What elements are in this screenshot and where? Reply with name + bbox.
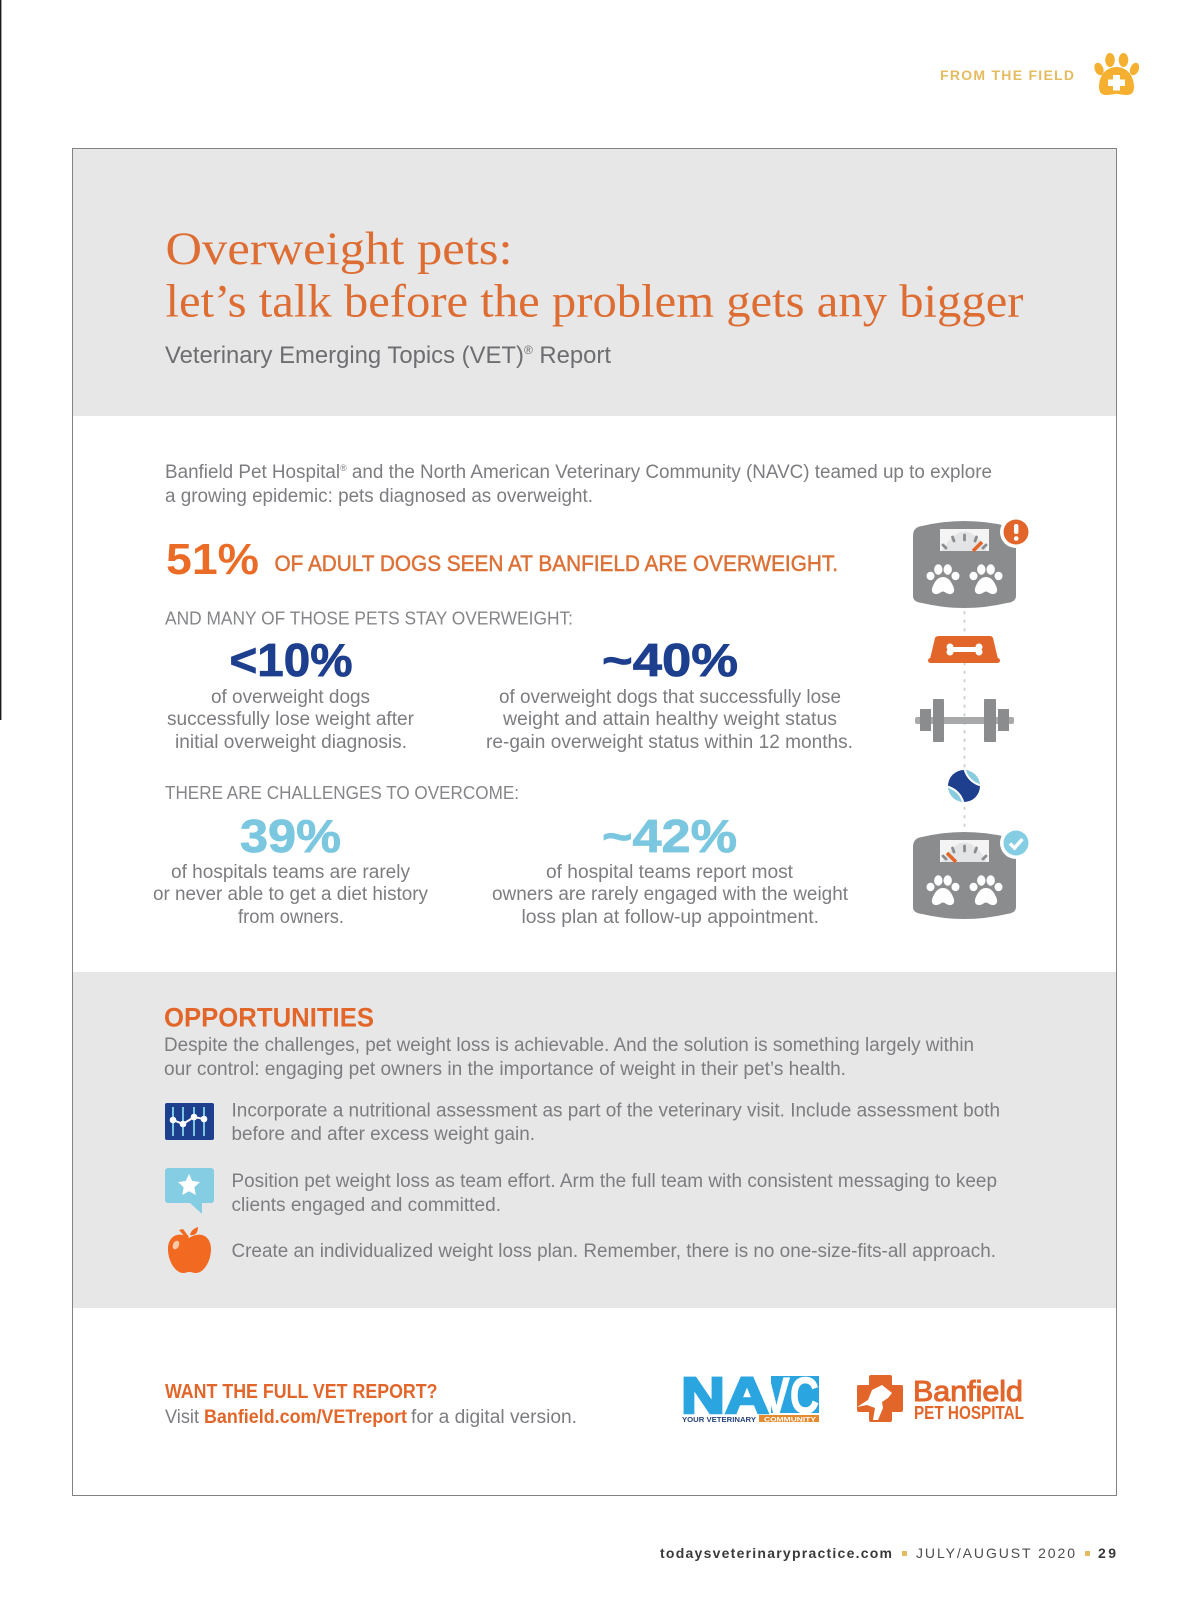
bullet text: team effort: clients engaged and committed. [232,1195,501,1216]
stat: 39 percent: or never able to get a diet history [153,884,428,905]
panel: opportunities [73,972,1116,1308]
bullet text: nutritional assessment [232,1100,1000,1145]
key stat: 51 percent [166,535,838,584]
stat: about 42 percent: of hospital teams report most [546,862,794,883]
stat: less than 10 percent [167,634,415,753]
logo: NAVC: YOUR VETERINARY [682,1417,756,1424]
logo: Banfield [857,1375,1024,1423]
stat: less than 10 percent: initial overweight diagnosis. [175,732,407,753]
stat: less than 10 percent: of overweight dogs [211,687,370,708]
icon: scale with alert [913,516,1032,608]
call to action: Banfield.com/VETreport [204,1407,408,1428]
stat: less than 10 percent: successfully lose weight after [167,709,415,730]
subtitle: Report [533,342,611,369]
stat: about 42 percent: ~42% [602,810,737,862]
icon: sliders [165,1103,214,1140]
icon: food bowl [928,636,1000,663]
heading: challenges: THERE ARE CHALLENGES TO OVERCOME: [165,782,519,803]
intro paragraph [165,462,992,507]
heading: opportunities: OPPORTUNITIES [164,1002,374,1032]
stat: about 42 percent: owners are rarely engaged with the weight [492,884,849,905]
stat: 39 percent: of hospitals teams are rarely [171,862,410,883]
icon: paw with cross [1093,53,1141,95]
section label: from the field: FROM THE FIELD [940,67,1074,83]
call to action [165,1381,577,1428]
stat: about 40 percent: ~40% [602,634,738,686]
logo: NAVC [681,1367,819,1424]
bullet text: nutritional assessment: Incorporate a nutritional assessment as part of the veterinary visit. Include assessment both [232,1100,1000,1122]
footer: todaysveterinarypractice.com [660,1545,892,1561]
bullet text: team effort: Position pet weight loss as team effort. Arm the full team with consistent messaging to keep [232,1171,997,1192]
icon: dumbbell [915,699,1014,742]
heading: stay overweight: AND MANY OF THOSE PETS STAY OVERWEIGHT: [165,608,573,628]
stat: about 42 percent [492,810,849,928]
icon: ball [948,770,980,802]
stat: 39 percent [153,810,428,928]
intro paragraph: a growing epidemic: pets diagnosed as overweight. [165,486,593,507]
stat: about 42 percent: loss plan at follow-up appointment. [522,907,819,928]
subtitle: ® [524,343,533,357]
logo: NAVC: VC [763,1367,819,1424]
opportunities intro text [164,1035,974,1080]
key stat: 51 percent: 51% [166,535,259,584]
stat: about 40 percent: of overweight dogs that successfully lose [499,687,841,708]
icon: scale with check [913,827,1032,919]
call to action: WANT THE FULL VET REPORT? [165,1381,438,1403]
intro paragraph: Banfield Pet Hospital [165,462,341,483]
panel: title band [73,149,1116,416]
logo: Banfield: Banfield [913,1376,1023,1408]
icon: apple [168,1227,211,1273]
logo: NAVC: NA [681,1367,769,1424]
opportunities intro text: our control: engaging pet owners in the importance of weight in their pet’s health. [164,1059,846,1080]
call to action: Visit [165,1407,200,1428]
footer: 29 [1098,1545,1116,1561]
title line 1: Overweight pets: [166,223,512,275]
call to action: for a digital version. [411,1407,577,1428]
logo: NAVC: COMMUNITY [764,1416,817,1424]
stat: less than 10 percent: <10% [230,634,352,686]
icon: star speech bubble [165,1168,214,1214]
subtitle: Veterinary Emerging Topics (VET) [165,342,526,369]
panel: report frame [72,148,1116,1496]
bullet text: individualized plan: Create an individualized weight loss plan. Remember, there is no one-size-fits-all approach. [232,1241,996,1262]
intro paragraph: and the North American Veterinary Community (NAVC) teamed up to explore [347,462,992,483]
stat: about 40 percent [486,634,853,753]
bullet text: team effort [232,1171,997,1216]
stat: about 40 percent: re-gain overweight status within 12 months. [486,732,853,753]
intro paragraph: ® [340,463,347,473]
title line 2: let’s talk before the problem gets any bigger [166,276,1024,328]
stat: 39 percent: 39% [240,810,341,862]
logo: Banfield: PET HOSPITAL [914,1403,1024,1423]
footer: JULY/AUGUST 2020 [916,1545,1075,1561]
stat: about 40 percent: weight and attain healthy weight status [502,709,837,730]
dotted connector [964,612,966,828]
bullet text: nutritional assessment: before and after excess weight gain. [232,1124,535,1145]
stat: 39 percent: from owners. [238,907,344,928]
key stat: 51 percent: OF ADULT DOGS SEEN AT BANFIELD ARE OVERWEIGHT. [274,551,838,576]
opportunities intro text: Despite the challenges, pet weight loss is achievable. And the solution is something largely within [164,1035,974,1056]
footer [660,1545,1116,1561]
